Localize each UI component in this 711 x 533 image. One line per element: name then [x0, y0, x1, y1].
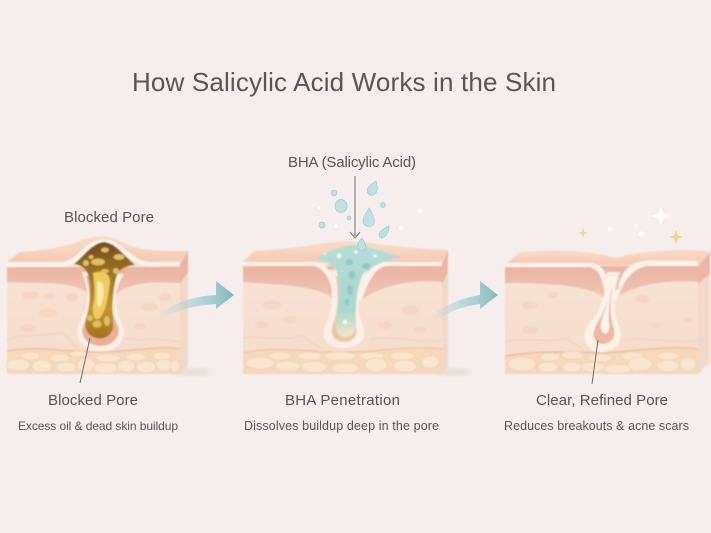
body texture	[522, 292, 693, 334]
body texture	[20, 291, 171, 332]
droplets	[319, 181, 389, 251]
leader line	[80, 338, 90, 383]
arrow 2	[430, 281, 498, 322]
body texture	[255, 300, 427, 333]
panel: BHA penetration	[243, 154, 472, 433]
caption: BHA penetration: BHA Penetration	[285, 392, 400, 409]
pore white edges	[505, 261, 698, 300]
arrow 1	[158, 281, 234, 319]
BHA pore fill	[316, 245, 400, 337]
fat layer	[505, 348, 698, 374]
description: BHA penetration: Dissolves buildup deep in the pore	[244, 419, 439, 433]
heading: blocked pore top: Blocked Pore	[64, 209, 154, 226]
skin block 3	[505, 250, 710, 374]
halo	[77, 272, 124, 352]
fat layer	[7, 349, 180, 374]
heading: BHA: BHA (Salicylic Acid)	[288, 154, 416, 171]
caption: clear pore: Clear, Refined Pore	[536, 392, 668, 409]
caption: blocked pore: Blocked Pore	[48, 392, 138, 409]
skin block 2	[243, 241, 472, 374]
leader line	[592, 340, 598, 384]
title: How Salicylic Acid Works in the Skin	[132, 67, 556, 97]
panel: blocked pore	[6, 209, 212, 433]
white surface line	[243, 262, 442, 300]
fat layer	[243, 348, 442, 374]
sparkles: droplet glints	[318, 207, 422, 230]
blocked pore plug	[74, 242, 135, 338]
description: clear pore: Reduces breakouts & acne scars	[504, 419, 689, 433]
skin block 1	[6, 236, 212, 374]
down arrow	[350, 176, 360, 238]
panel: clear pore	[504, 207, 710, 433]
sparkles	[578, 207, 683, 244]
description: blocked pore: Excess oil & dead skin buildup	[18, 419, 178, 433]
